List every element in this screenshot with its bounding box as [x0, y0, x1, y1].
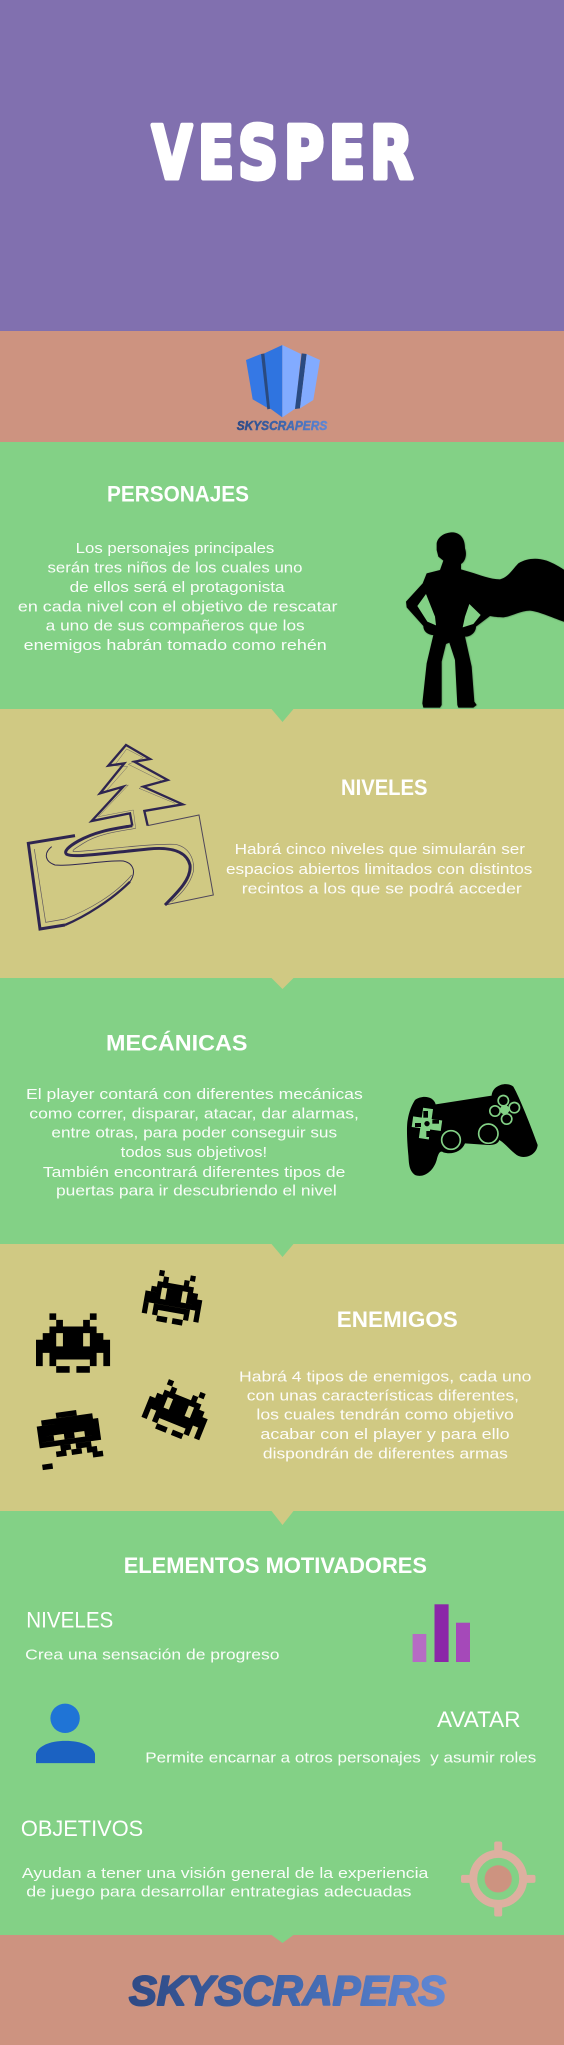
text: objetivos: Ayudan a tener una visión general de la experiencia	[22, 1865, 429, 1882]
icon: skyscrapers logo: SKYSCRAPERS	[237, 419, 328, 433]
text block: personajes: de ellos será el protagonista	[70, 579, 285, 596]
panel: enemigos	[0, 1244, 564, 1511]
arrow: niveles to mecanicas	[272, 978, 294, 989]
heading: mecanicas: MECÁNICAS	[106, 1030, 248, 1056]
text block: enemigos: acabar con el player y para ello	[260, 1426, 510, 1443]
arrow: personajes to niveles	[272, 709, 294, 722]
text block: personajes: Los personajes principales	[76, 540, 274, 557]
subheading: niveles: NIVELES	[26, 1608, 113, 1633]
text block: niveles: recintos a los que se podrá acceder	[242, 880, 522, 897]
arrow: elementos to footer	[272, 1935, 294, 1943]
text block: mecanicas: entre otras, para poder conseguir sus	[51, 1124, 337, 1142]
heading: niveles: NIVELES	[341, 775, 428, 800]
panel: title background	[0, 0, 564, 331]
text: objetivos: de juego para desarrollar entrategias adecuadas	[26, 1884, 411, 1901]
arrow: mecanicas to enemigos	[272, 1244, 294, 1257]
text block: personajes	[18, 540, 338, 654]
text block: niveles	[226, 841, 532, 897]
panel: elementos motivadores	[0, 1511, 564, 1935]
panel: footer	[0, 1935, 564, 2045]
arrow: enemigos to elementos	[272, 1511, 294, 1525]
text block: mecanicas	[26, 1086, 363, 1200]
text block: personajes: a uno de sus compañeros que los	[46, 618, 305, 634]
title: V	[152, 111, 192, 195]
text block: personajes: enemigos habrán tomado como rehén	[24, 637, 327, 654]
icon: invader top	[141, 1268, 206, 1328]
footer logo text: SKYSCRAPERS	[129, 1967, 446, 2014]
panel: personajes	[0, 442, 564, 709]
text block: mecanicas: puertas para ir descubriendo el nivel	[56, 1183, 337, 1200]
panel: logo band	[0, 331, 564, 442]
subheading: avatar: AVATAR	[437, 1707, 520, 1732]
icon: invader bottom	[35, 1407, 104, 1470]
heading: elementos motivadores: ELEMENTOS MOTIVADORES	[124, 1553, 427, 1578]
text block: niveles: espacios abiertos limitados con distintos	[226, 861, 532, 878]
text block: enemigos: Habrá 4 tipos de enemigos, cada uno	[239, 1368, 531, 1386]
title: E	[198, 111, 234, 195]
title	[152, 111, 413, 195]
text block: enemigos	[239, 1368, 531, 1463]
icons: space invaders	[35, 1268, 216, 1470]
icon: hero silhouette with cape	[406, 532, 564, 708]
icon: map with tree and road	[28, 745, 213, 929]
title: R	[370, 111, 413, 195]
title: P	[284, 111, 324, 195]
panel: mecanicas	[0, 978, 564, 1244]
title: E	[329, 111, 365, 195]
text block: enemigos: dispondrán de diferentes armas	[263, 1446, 508, 1463]
text block: personajes: serán tres niños de los cuales uno	[48, 559, 302, 576]
icon: bar chart	[413, 1604, 470, 1662]
heading: personajes: PERSONAJES	[107, 482, 249, 506]
text block: mecanicas: También encontrará diferentes tipos de	[43, 1164, 345, 1181]
text: objetivos	[22, 1865, 429, 1901]
text block: mecanicas: El player contará con diferentes mecánicas	[26, 1086, 363, 1103]
text: niveles: Crea una sensación de progreso	[25, 1646, 280, 1664]
icon: gamepad	[407, 1084, 538, 1176]
heading: enemigos: ENEMIGOS	[337, 1307, 458, 1332]
subheading: objetivos: OBJETIVOS	[21, 1816, 143, 1841]
text: avatar: Permite encarnar a otros personajes y asumir roles	[145, 1750, 536, 1767]
title: S	[238, 111, 278, 195]
icon: avatar	[36, 1704, 95, 1763]
text block: enemigos: con unas características diferentes,	[247, 1388, 519, 1404]
icon: invader straight	[36, 1313, 110, 1373]
text block: enemigos: los cuales tendrán como objetivo	[256, 1407, 514, 1424]
text block: personajes: en cada nivel con el objetivo de rescatar	[18, 598, 338, 616]
icon: target	[461, 1842, 536, 1916]
panel: niveles	[0, 709, 564, 978]
text block: mecanicas: todos sus objetivos!	[121, 1144, 267, 1161]
icon: skyscrapers logo	[237, 345, 328, 433]
icon: invader right	[139, 1375, 216, 1446]
text block: mecanicas: como correr, disparar, atacar, dar alarmas,	[29, 1105, 359, 1122]
text block: niveles: Habrá cinco niveles que simularán ser	[235, 841, 525, 858]
